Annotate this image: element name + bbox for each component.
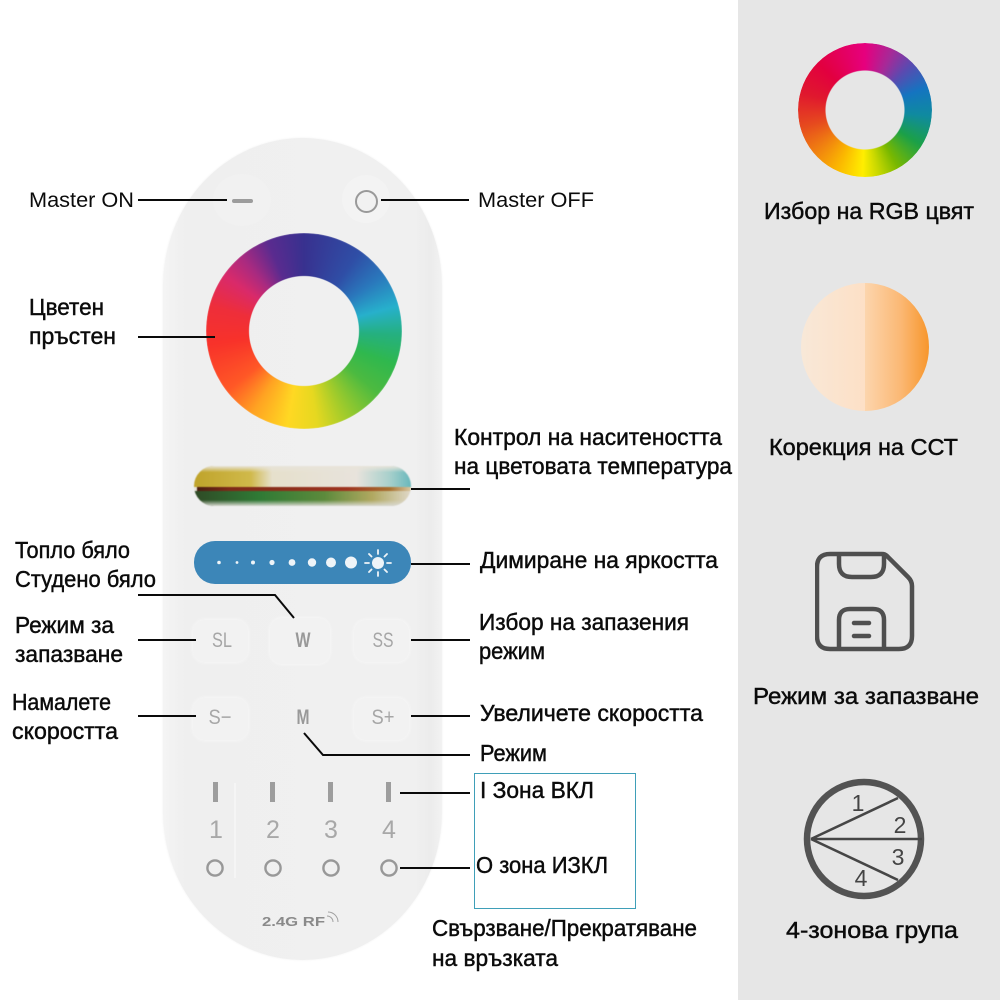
label: saved mode selection: режим [479,638,545,664]
label: warm cold white: Студено бяло [15,566,156,592]
colour ring [206,233,402,429]
sidebar captions [753,198,979,944]
label: warm cold white [15,537,156,592]
zone numbers: 2 [266,816,280,844]
label: saved mode selection: Избор на запазения [479,609,689,635]
rf logo [262,912,338,929]
label: saturation control: Контрол на наситеността [454,424,722,450]
zone digits: 4 [855,865,868,891]
button: S+ [354,698,409,740]
label: colour ring: пръстен [29,323,116,349]
remote body [163,138,442,960]
label: saturation control [454,424,732,479]
sun rays [365,550,391,576]
slider dark red band [197,487,411,491]
label: warm cold white: Топло бяло [15,537,130,563]
label: master on: Master ON [29,189,134,212]
zone digits: 2 [894,812,906,838]
label: zone off: O зона ИЗКЛ [476,852,608,878]
label: link unlink: на връзката [432,945,558,971]
button: master on [213,174,271,226]
panel: right sidebar [738,0,1000,1000]
label: save mode [15,612,123,667]
button letters [208,629,394,729]
zone on bars [213,782,391,802]
button letters: M [296,706,310,729]
label: increase speed: Увеличете скоростта [480,700,703,726]
remote button labels and zone keys [206,629,398,929]
label: save mode: Режим за [15,612,114,638]
label: saved mode selection [479,609,689,664]
caption: four zone group: 4-зонова група [786,917,958,943]
function buttons [163,598,442,738]
zone digits: 3 [892,844,904,870]
zone highlight frame [474,774,636,908]
zone digits [852,790,906,891]
zone numbers: 3 [324,816,338,844]
button letters: S− [208,706,232,729]
button letters: SL [212,629,232,652]
button letters: S+ [372,706,394,729]
icon: CCT circle [801,283,929,411]
label: link unlink: Свързване/Прекратяване [432,915,697,941]
button: master off [342,175,390,223]
slider lower band [194,491,411,506]
icon: floppy disk [815,552,914,652]
slider upper band [194,466,411,487]
label: dimming: Димиране на яркостта [480,547,718,573]
caption: RGB colour selection: Избор на RGB цвят [764,198,974,224]
button: W [270,618,330,664]
zone numbers [209,816,396,844]
zone numbers: 4 [382,816,396,844]
zone numbers: 1 [209,816,223,844]
rf logo: 2.4G RF [262,914,325,929]
zone key divider [234,783,236,878]
zone digits: 1 [852,790,864,816]
button letters: SS [372,629,394,652]
caption: CCT correction: Корекция на ССТ [769,434,958,460]
zone off circles [207,860,397,876]
label: decrease speed: скоростта [12,718,118,744]
label: colour ring [29,294,116,349]
button: SS [354,620,409,662]
label: decrease speed: Намалете [12,689,111,715]
remote control [163,138,442,960]
button: SL [193,620,248,662]
label: master off: Master OFF [478,189,594,212]
label: save mode: запазване [15,641,123,667]
label: mode: Режим [480,740,547,766]
label: colour ring: Цветен [29,294,104,320]
button: S- [193,698,248,740]
button letters: W [296,629,311,652]
label: zone on: I Зона ВКЛ [480,777,594,803]
icon: four zone circle [804,778,924,900]
icon: RGB ring [798,43,932,177]
label: decrease speed [12,689,118,744]
caption: save mode: Режим за запазване [753,683,979,709]
brightness slider [194,541,411,584]
colour temperature slider [194,466,411,506]
label: saturation control: на цветовата температура [454,453,732,479]
brightness dots [217,556,384,569]
label: link unlink [432,915,697,971]
